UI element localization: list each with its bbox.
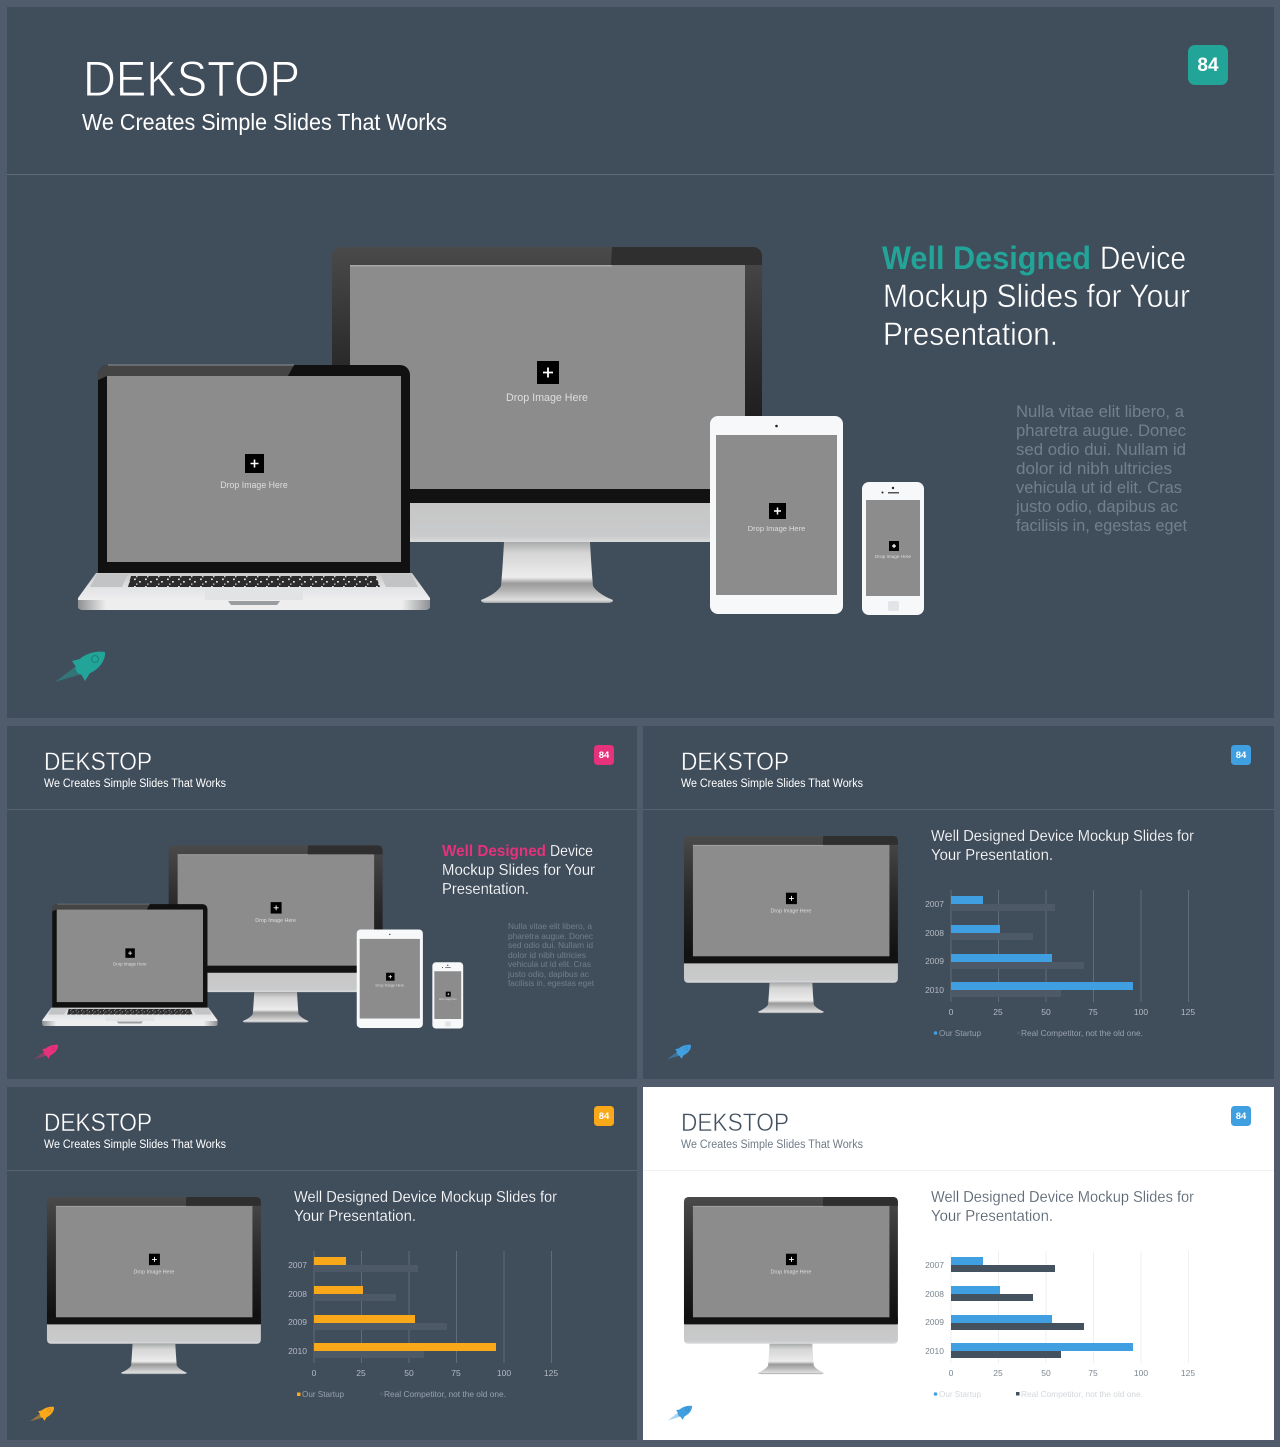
headline: Mockup Slides for Your	[883, 278, 1190, 314]
bar chart: 2008	[925, 1289, 944, 1299]
device: tablet	[357, 929, 423, 1028]
headline: Well Designed Device Mockup Slides for	[294, 1189, 558, 1206]
bar chart: 2009	[288, 1317, 307, 1327]
chart legend: Real Competitor, not the old one.	[1021, 1389, 1143, 1399]
paragraph: facilisis in, egestas eget	[508, 978, 595, 988]
paragraph: vehicula ut id elit. Cras	[1016, 478, 1182, 497]
bar chart: 2008	[925, 928, 944, 938]
chart legend: Our Startup	[939, 1028, 981, 1038]
headline: Device	[1100, 240, 1186, 276]
device: desktop monitor	[47, 1197, 261, 1374]
chart legend: Real Competitor, not the old one.	[384, 1389, 506, 1399]
device: tablet: Drop Image Here	[748, 524, 805, 533]
bar chart: 0	[949, 1007, 954, 1017]
bar chart: 25	[993, 1007, 1003, 1017]
bar chart: 0	[312, 1368, 317, 1378]
headline: Presentation.	[442, 881, 529, 898]
bar chart: 100	[1134, 1368, 1148, 1378]
panel: main slide	[7, 7, 1274, 718]
subtitle: We Creates Simple Slides That Works	[44, 1139, 226, 1151]
paragraph: Nulla vitae elit libero, a	[508, 921, 592, 931]
bar chart: 2010	[288, 1346, 307, 1356]
paragraph: dolor id nibh ultricies	[508, 950, 586, 960]
device: laptop	[42, 904, 217, 1026]
headline: Well Designed Device Mockup Slides for	[931, 1189, 1195, 1206]
headline	[931, 1189, 1195, 1225]
paragraph	[507, 921, 595, 988]
bar chart: 50	[404, 1368, 414, 1378]
subtitle: We Creates Simple Slides That Works	[82, 109, 447, 135]
subtitle: We Creates Simple Slides That Works	[681, 778, 863, 790]
page badge	[594, 1106, 614, 1126]
device: desktop monitor: Drop Image Here	[255, 918, 296, 924]
device: desktop monitor: Drop Image Here	[771, 909, 811, 915]
bar chart: 125	[1181, 1368, 1195, 1378]
headline	[442, 843, 596, 898]
icon: rocket	[668, 1406, 692, 1420]
subtitle: We Creates Simple Slides That Works	[44, 778, 226, 790]
device: tablet	[710, 416, 843, 614]
headline	[882, 240, 1190, 352]
paragraph: sed odio dui. Nullam id	[508, 940, 593, 950]
bar chart: 2009	[925, 956, 944, 966]
device: phone: Drop Image Here	[875, 554, 911, 559]
bar chart	[925, 1251, 1195, 1399]
chart legend: Our Startup	[939, 1389, 981, 1399]
bar chart: 2007	[925, 1260, 944, 1270]
device: desktop monitor	[684, 836, 898, 1013]
device: desktop monitor	[684, 1197, 898, 1374]
page badge	[1231, 1106, 1251, 1126]
device: phone	[862, 482, 924, 615]
bar chart: 2010	[925, 985, 944, 995]
bar chart: 75	[1088, 1007, 1098, 1017]
chart legend: Real Competitor, not the old one.	[1021, 1028, 1143, 1038]
title: DEKSTOP	[44, 748, 152, 776]
device: desktop monitor	[169, 845, 383, 1022]
page badge: 84	[1197, 55, 1219, 76]
page badge: 84	[1236, 1111, 1247, 1122]
panel: white chart slide	[643, 1087, 1274, 1440]
title: DEKSTOP	[681, 1109, 789, 1137]
headline: Your Presentation.	[931, 1208, 1053, 1225]
headline	[931, 828, 1195, 864]
chart legend	[934, 1389, 1143, 1399]
device: laptop: Drop Image Here	[220, 480, 288, 490]
bar chart: 25	[993, 1368, 1003, 1378]
headline: Device	[550, 843, 593, 860]
bar chart: 125	[1181, 1007, 1195, 1017]
bar chart: 100	[1134, 1007, 1148, 1017]
title: DEKSTOP	[681, 748, 789, 776]
chart legend: Our Startup	[302, 1389, 344, 1399]
icon: rocket	[55, 652, 105, 682]
title: DEKSTOP	[44, 1109, 152, 1137]
bar chart	[288, 1251, 558, 1399]
bar chart: 2009	[925, 1317, 944, 1327]
bar chart	[925, 890, 1195, 1038]
icon: rocket	[30, 1407, 54, 1421]
headline: Well Designed	[882, 240, 1091, 276]
bar chart: 50	[1041, 1007, 1051, 1017]
paragraph: justo odio, dapibus ac	[1015, 497, 1178, 516]
page badge: 84	[599, 1111, 610, 1122]
panel: blue chart slide	[643, 726, 1274, 1079]
headline: Your Presentation.	[931, 847, 1053, 864]
device: laptop: Drop Image Here	[113, 961, 147, 966]
bar chart: 50	[1041, 1368, 1051, 1378]
paragraph: vehicula ut id elit. Cras	[508, 959, 591, 969]
subtitle: We Creates Simple Slides That Works	[681, 1139, 863, 1151]
headline: Mockup Slides for Your	[442, 862, 596, 879]
paragraph: sed odio dui. Nullam id	[1016, 440, 1186, 459]
devices group	[42, 845, 463, 1028]
paragraph: pharetra augue. Donec	[1016, 421, 1186, 440]
device: phone: Drop Image Here	[439, 998, 457, 1001]
icon: rocket	[34, 1045, 58, 1059]
bar chart: 2010	[925, 1346, 944, 1356]
paragraph: pharetra augue. Donec	[508, 931, 594, 941]
bar chart: 100	[497, 1368, 511, 1378]
bar chart: 75	[1088, 1368, 1098, 1378]
device: desktop monitor: Drop Image Here	[134, 1270, 174, 1276]
page badge	[1188, 45, 1228, 85]
paragraph: justo odio, dapibus ac	[507, 969, 590, 979]
page badge: 84	[1236, 750, 1247, 761]
headline: Your Presentation.	[294, 1208, 416, 1225]
device: tablet: Drop Image Here	[376, 984, 404, 988]
panel: pink slide	[7, 726, 637, 1079]
device: laptop	[78, 365, 430, 610]
paragraph	[1015, 402, 1187, 535]
paragraph: Nulla vitae elit libero, a	[1016, 402, 1185, 421]
device: desktop monitor: Drop Image Here	[771, 1270, 811, 1276]
paragraph: facilisis in, egestas eget	[1016, 516, 1187, 535]
chart legend	[297, 1389, 506, 1399]
headline: Presentation.	[883, 316, 1058, 352]
headline: Well Designed	[442, 843, 546, 860]
title: DEKSTOP	[83, 51, 300, 107]
page badge	[594, 745, 614, 765]
bar chart: 125	[544, 1368, 558, 1378]
bar chart: 25	[356, 1368, 366, 1378]
bar chart: 2007	[288, 1260, 307, 1270]
paragraph: dolor id nibh ultricies	[1016, 459, 1172, 478]
panel: orange chart slide	[7, 1087, 637, 1440]
chart legend	[934, 1028, 1143, 1038]
device: phone	[432, 962, 463, 1028]
headline	[294, 1189, 558, 1225]
headline: Well Designed Device Mockup Slides for	[931, 828, 1195, 845]
bar chart: 2008	[288, 1289, 307, 1299]
bar chart: 2007	[925, 899, 944, 909]
page badge: 84	[599, 750, 610, 761]
device: desktop monitor	[332, 247, 762, 603]
device: desktop monitor: Drop Image Here	[506, 392, 588, 404]
bar chart: 0	[949, 1368, 954, 1378]
icon: rocket	[667, 1045, 691, 1059]
page badge	[1231, 745, 1251, 765]
bar chart: 75	[451, 1368, 461, 1378]
